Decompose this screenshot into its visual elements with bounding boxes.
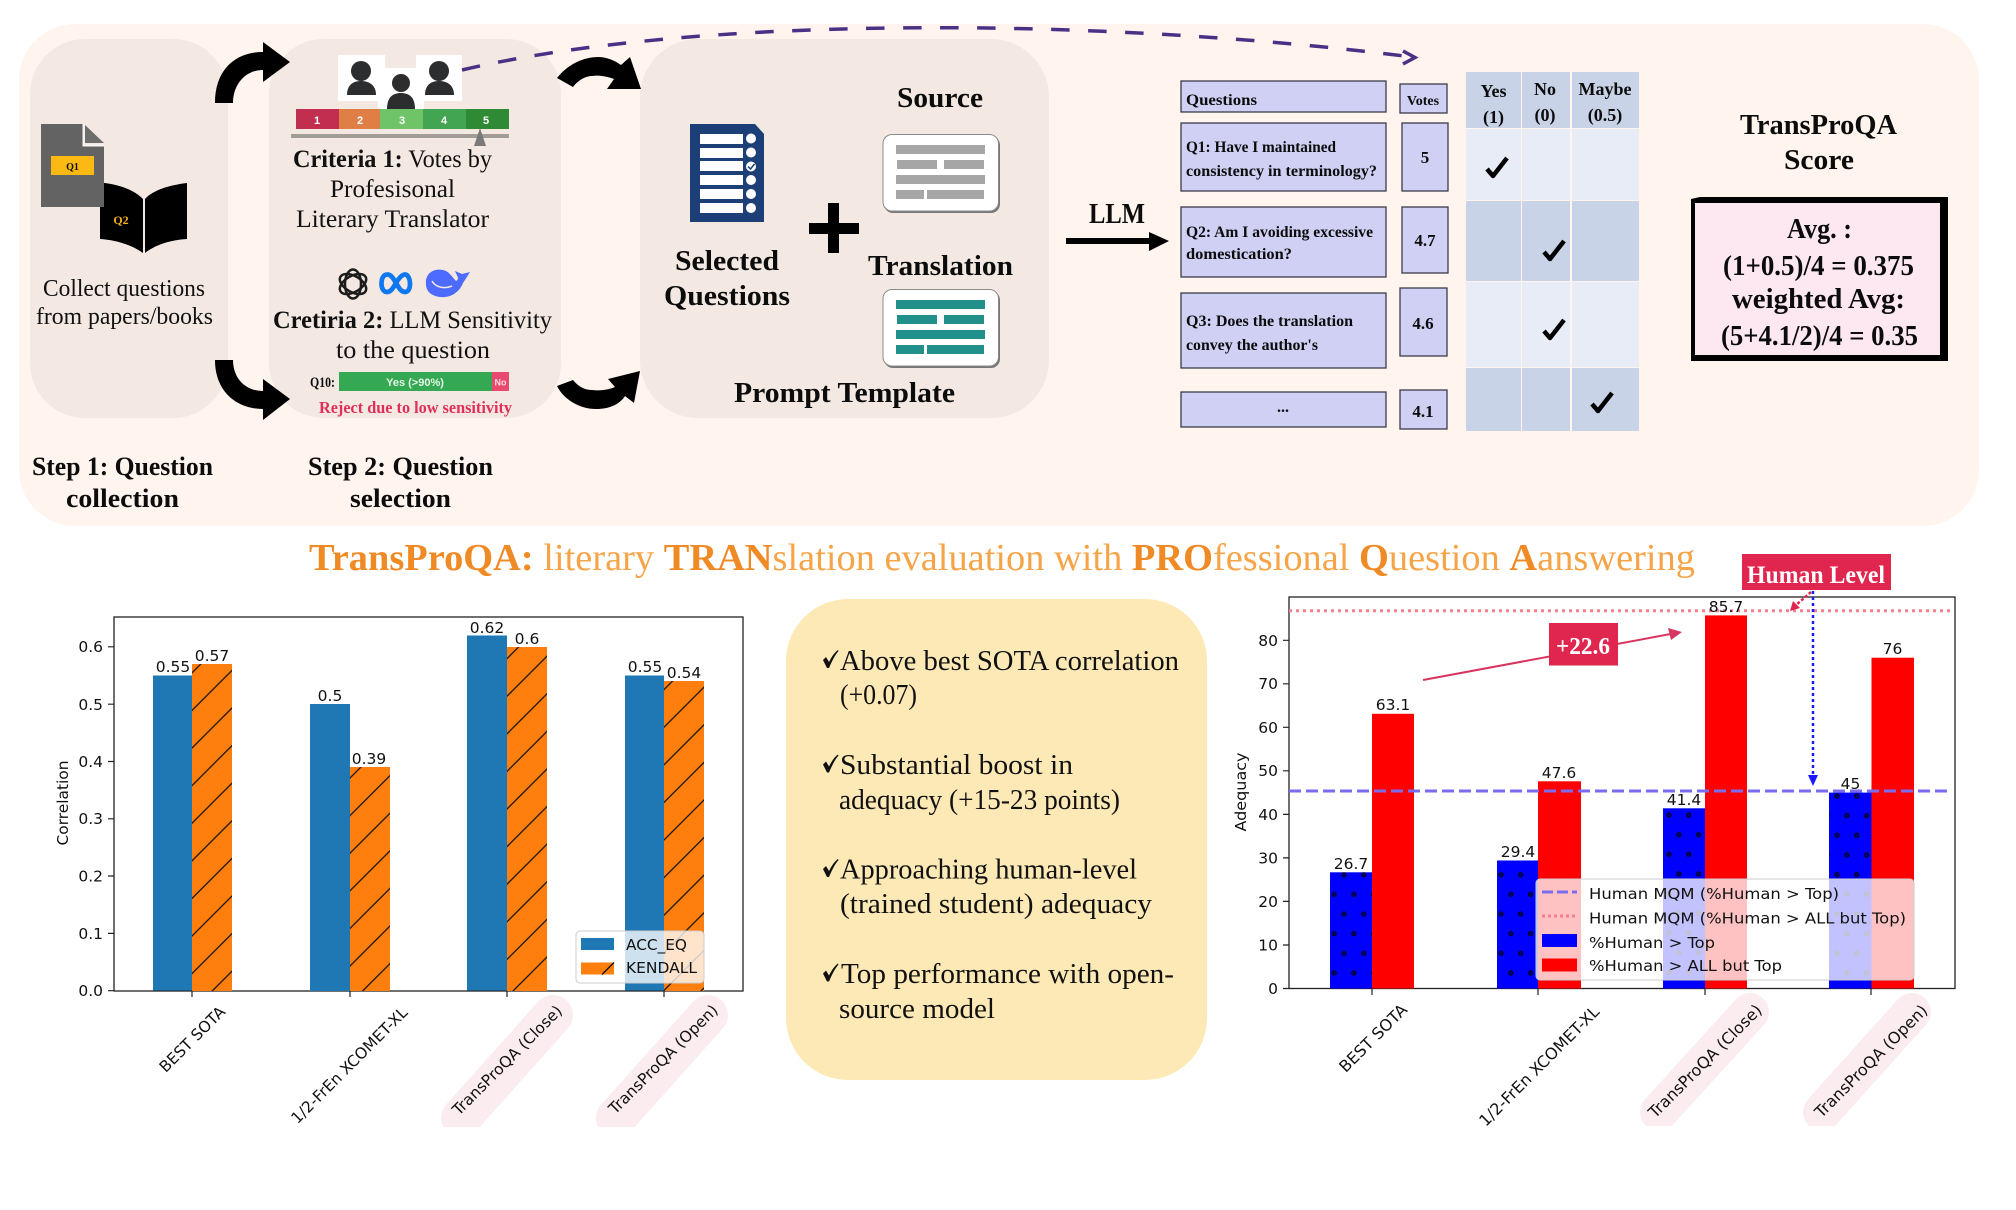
human level lines	[1289, 611, 1952, 791]
table: yes no maybe answers: No	[1534, 79, 1556, 99]
text: questions and votes: Q3: Does the translation	[1186, 313, 1353, 330]
highlight: TransProQA labels left	[461, 1015, 708, 1118]
text: questions and votes: 4.6	[1412, 314, 1434, 333]
y axis ticks: 0.1	[78, 925, 103, 943]
value labels: 0.55	[628, 658, 662, 676]
panel: key findings	[786, 599, 1207, 1080]
text: questions and votes	[1186, 92, 1440, 421]
vote scale 1 to 5: 4	[441, 115, 448, 127]
icon: check marks	[1487, 158, 1612, 411]
text: criteria 2: to the question	[336, 337, 491, 364]
value labels: 0.6	[515, 630, 539, 648]
value labels: 63.1	[1376, 696, 1410, 714]
callout: human level: Human Level	[1747, 562, 1885, 589]
sensitivity bar Q10: No	[494, 378, 507, 388]
text: questions and votes: 4.1	[1412, 402, 1434, 421]
heading: TransProQA score: Score	[1784, 145, 1854, 176]
icon: open book with Q2	[100, 183, 187, 253]
icon: document with Q1: Q1	[66, 162, 79, 173]
sensitivity bar Q10: Yes (>90%)	[386, 377, 444, 389]
legend: ACC_EQ	[626, 936, 687, 955]
category labels	[1335, 1000, 1931, 1130]
vote scale 1 to 5	[291, 109, 509, 146]
y axis ticks: 80	[1258, 632, 1278, 650]
panel: score box: (5+4.1/2)/4 = 0.35	[1721, 321, 1918, 352]
callout: +22.6	[1549, 623, 1618, 666]
icon: plus	[809, 203, 859, 253]
heading: step 2: selection	[350, 484, 452, 513]
category labels: BEST SOTA	[156, 1003, 229, 1076]
arrow: step 1 to criteria 1	[215, 42, 290, 103]
finding 1: (+0.07)	[840, 679, 917, 711]
finding 2: Substantial boost in	[840, 749, 1073, 781]
y axis ticks: 0.4	[78, 753, 103, 771]
vote scale 1 to 5: 5	[483, 115, 489, 127]
y axis ticks: 0.6	[78, 638, 103, 656]
arrow: step 1 to criteria 2	[215, 360, 290, 420]
icon: three translators	[338, 55, 462, 109]
text: selected questions: Selected	[675, 245, 779, 277]
finding 4: source model	[839, 993, 995, 1025]
category labels: TransProQA (Open)	[1810, 1001, 1931, 1122]
arrow: human level dotted red	[1790, 592, 1811, 611]
value labels: 45	[1841, 775, 1860, 793]
heading: step 1: Step 1: Question	[32, 452, 214, 481]
y axis ticks: 20	[1258, 893, 1278, 911]
text: rejection note: Reject due to low sensitivity	[319, 398, 512, 417]
legend: KENDALL	[626, 959, 697, 977]
legend: %Human > Top	[1589, 934, 1715, 952]
panel: score box	[1691, 197, 1948, 361]
icon: OpenAI logo	[336, 270, 370, 298]
value labels	[1334, 598, 1902, 873]
y axis ticks: 0.0	[78, 982, 103, 1000]
text: criteria 1: Literary Translator	[296, 206, 490, 233]
finding 4: Top performance with open-	[841, 958, 1174, 990]
icon: Meta logo	[382, 274, 410, 292]
sensitivity bar Q10	[310, 372, 509, 391]
vote scale 1 to 5: 3	[399, 115, 405, 127]
y axis ticks	[1258, 632, 1278, 998]
arrow: criteria 1 to prompt	[557, 57, 641, 89]
arrow: dashed votes link	[462, 28, 1415, 70]
panel: prompt template	[640, 39, 1049, 418]
heading: step 1: collection	[66, 484, 180, 513]
y axis ticks: 0	[1268, 980, 1278, 998]
text: criteria 1: Criteria 1: Votes by	[293, 146, 495, 173]
value labels: 0.54	[667, 664, 701, 682]
bar chart: adequacy	[1232, 554, 1955, 1130]
y axis ticks: 0.2	[78, 868, 103, 886]
text: questions and votes: Votes	[1407, 94, 1440, 109]
table: yes no maybe answers: (0.5)	[1588, 105, 1622, 126]
label: prompt template: Prompt Template	[734, 377, 955, 409]
category labels: 1/2-FrEn XCOMET-XL	[288, 1003, 412, 1127]
panel: questions list	[1181, 81, 1448, 429]
y axis ticks: 0.3	[78, 810, 103, 828]
arrow: criteria 2 to prompt	[557, 371, 640, 409]
y axis ticks: 40	[1258, 806, 1278, 824]
y axis ticks: 70	[1258, 675, 1278, 693]
panel: step 2 question selection	[269, 39, 561, 418]
text: questions and votes: Questions	[1186, 92, 1257, 109]
panel: step 1 question collection	[30, 39, 228, 418]
label: translation: Translation	[868, 250, 1013, 282]
heading: TransProQA score: TransProQA	[1740, 110, 1898, 141]
axis label: Adequacy	[1232, 752, 1250, 832]
text: selected questions: Questions	[664, 280, 790, 312]
value labels: 0.55	[156, 658, 190, 676]
value labels: 41.4	[1667, 791, 1701, 809]
value labels: 0.62	[470, 619, 504, 637]
panel: score box: weighted Avg:	[1732, 284, 1905, 315]
icon: question checklist	[690, 124, 764, 222]
text: questions and votes: consistency in terminology?	[1186, 163, 1377, 180]
text: questions and votes: 5	[1421, 148, 1429, 167]
legend: %Human > ALL but Top	[1589, 957, 1782, 975]
text: collect questions: from papers/books	[36, 304, 213, 330]
table: yes no maybe answers	[1466, 72, 1639, 431]
vote scale 1 to 5: 2	[357, 115, 363, 127]
icon: document with Q1	[41, 124, 104, 207]
axis label: Correlation	[54, 760, 72, 846]
panel: score box: Avg. :	[1787, 214, 1852, 245]
card: source text	[883, 134, 1000, 213]
table: yes no maybe answers: (1)	[1483, 107, 1504, 128]
category labels: TransProQA (Close)	[1644, 1001, 1766, 1122]
table: yes no maybe answers: Maybe	[1578, 79, 1632, 99]
value labels: 0.57	[195, 647, 229, 665]
value labels	[156, 619, 701, 768]
text: questions and votes: Q2: Am I avoiding excessive	[1186, 224, 1373, 241]
value labels: 47.6	[1542, 764, 1576, 782]
highlight: TransProQA labels right	[1659, 1012, 1912, 1112]
category labels: 1/2-FrEn XCOMET-XL	[1475, 1002, 1603, 1130]
text: criteria 1: Profesisonal	[330, 176, 455, 203]
legend	[1536, 879, 1914, 980]
y axis ticks: 60	[1258, 719, 1278, 737]
arrow: improvement	[1423, 628, 1682, 680]
text: questions and votes: ...	[1277, 399, 1289, 416]
value labels: 26.7	[1334, 855, 1368, 873]
heading: step 2: Step 2: Question	[308, 452, 494, 481]
icon: DeepSeek whale	[426, 270, 470, 297]
arrow: LLM: LLM	[1089, 199, 1145, 230]
finding 2: adequacy (+15-23 points)	[839, 784, 1120, 816]
text: questions and votes: convey the author's	[1186, 337, 1318, 354]
arrow: LLM	[1066, 199, 1169, 251]
finding 3: (trained student) adequacy	[840, 888, 1153, 920]
title: TransProQA: literary TRANslation evaluation with PROfessional Question Aanswering	[309, 537, 1695, 579]
vote scale 1 to 5: 1	[314, 115, 320, 127]
y axis ticks: 0.5	[78, 696, 103, 714]
panel: pipeline background	[19, 24, 1979, 526]
bar chart: correlation	[54, 617, 743, 1127]
y axis ticks: 10	[1258, 936, 1278, 954]
category labels: TransProQA (Open)	[604, 1001, 722, 1118]
value labels: 29.4	[1501, 843, 1535, 861]
value labels: 0.39	[352, 750, 386, 768]
arrow: human level dotted blue	[1808, 591, 1818, 786]
label: source: Source	[897, 82, 983, 114]
icon: open book with Q2: Q2	[113, 213, 129, 227]
text: collect questions: Collect questions	[43, 276, 205, 302]
text: criteria 2: Cretiria 2: LLM Sensitivity	[273, 307, 556, 334]
value labels: 76	[1883, 640, 1902, 658]
finding 1: Above best SOTA correlation	[840, 645, 1179, 677]
category labels: BEST SOTA	[1335, 1000, 1411, 1076]
legend: Human MQM (%Human > ALL but Top)	[1589, 910, 1906, 928]
callout: +22.6: +22.6	[1556, 634, 1610, 660]
panel: score box: (1+0.5)/4 = 0.375	[1723, 251, 1914, 282]
value labels: 0.5	[318, 687, 342, 705]
finding 4	[823, 958, 1174, 1025]
bars	[153, 636, 704, 991]
category labels: TransProQA (Close)	[448, 1002, 566, 1120]
category labels	[156, 1001, 722, 1127]
card: translation text	[883, 290, 1000, 368]
value labels: 85.7	[1709, 598, 1743, 616]
text: questions and votes: domestication?	[1186, 246, 1292, 263]
table: yes no maybe answers: Yes	[1480, 81, 1506, 101]
legend: Human MQM (%Human > Top)	[1589, 885, 1839, 903]
text: questions and votes: Q1: Have I maintained	[1186, 139, 1336, 156]
sensitivity bar Q10: Q10:	[310, 375, 335, 391]
y axis ticks	[78, 638, 103, 1000]
y axis ticks: 50	[1258, 762, 1278, 780]
finding 3: Approaching human-level	[840, 854, 1137, 886]
y axis ticks: 30	[1258, 850, 1278, 868]
table: yes no maybe answers: (0)	[1534, 105, 1556, 126]
finding 2	[823, 749, 1120, 816]
text: questions and votes: 4.7	[1414, 231, 1436, 250]
bars	[1330, 615, 1914, 988]
finding 1	[823, 645, 1179, 711]
finding 3	[823, 854, 1153, 920]
legend	[576, 931, 704, 983]
